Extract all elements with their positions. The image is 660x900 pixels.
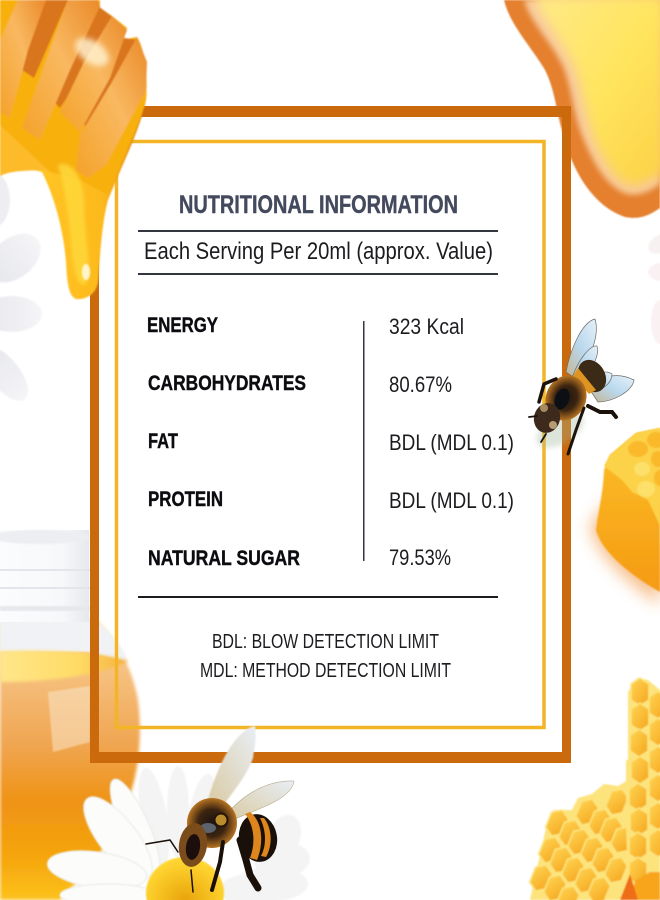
sub: disc (146, 857, 224, 900)
illustration: honeycomb right (590, 428, 660, 605)
divider: lower (138, 273, 498, 275)
divider: bottom (138, 596, 498, 598)
sub: tower cells (626, 760, 660, 900)
sub: bee wings (566, 319, 634, 402)
icon: left daisy petals (0, 173, 50, 408)
icon: bee top right (529, 319, 634, 455)
nutrient values (389, 314, 514, 570)
sub: bee abdomen (235, 811, 281, 865)
nutrient labels: ENERGY (147, 314, 218, 337)
sub: bee legs (529, 379, 616, 454)
sub: bee head (531, 400, 563, 436)
icon: daisy bottom (45, 766, 311, 900)
sub: slanted cells (527, 786, 636, 900)
nutrient labels: FAT (148, 430, 178, 453)
nutrient values: 323 Kcal (389, 314, 464, 339)
sub: dark wood behind slats (16, 0, 138, 128)
sub: bee thorax (187, 798, 237, 848)
sub: dipper slats (0, 0, 147, 178)
nutrient values: 80.67% (389, 372, 452, 397)
sub: bee thorax (538, 369, 594, 427)
sub: front petals (45, 774, 169, 900)
illustration: honey blob top right (504, 0, 660, 218)
nutrient labels: NATURAL SUGAR (148, 547, 300, 570)
frame: outer orange (90, 106, 571, 763)
divider: top (138, 230, 498, 232)
heading: NUTRITIONAL INFORMATION (179, 191, 458, 219)
subheading: Each Serving Per 20ml (approx. Value) (144, 238, 493, 265)
footnotes: MDL: METHOD DETECTION LIMIT (200, 660, 451, 682)
footnotes: BDL: BLOW DETECTION LIMIT (212, 631, 439, 653)
nutrient labels: PROTEIN (148, 488, 223, 511)
illustration: honeycomb bottom right (527, 678, 660, 900)
illustration: honey dipper with drip (0, 0, 147, 299)
icon: bee bottom (146, 726, 294, 892)
sub: back petals (133, 766, 311, 900)
nutrient values: BDL (MDL 0.1) (389, 488, 514, 513)
sub: bee head (176, 821, 210, 869)
frame: inner yellow (116, 142, 544, 728)
illustration: honey jar (0, 530, 140, 900)
footnotes (200, 631, 451, 682)
sub: comb cells (628, 432, 660, 497)
icon: right faint petals (645, 228, 660, 344)
nutrient values: BDL (MDL 0.1) (389, 430, 514, 455)
nutrient labels: CARBOHYDRATES (148, 372, 306, 395)
nutrient labels (147, 314, 306, 570)
column divider (363, 321, 364, 561)
sub: bee wings (208, 726, 256, 808)
nutrient values: 79.53% (389, 545, 451, 570)
sub: bee abdomen (572, 355, 612, 397)
sub: bee legs and antenna (146, 840, 258, 892)
